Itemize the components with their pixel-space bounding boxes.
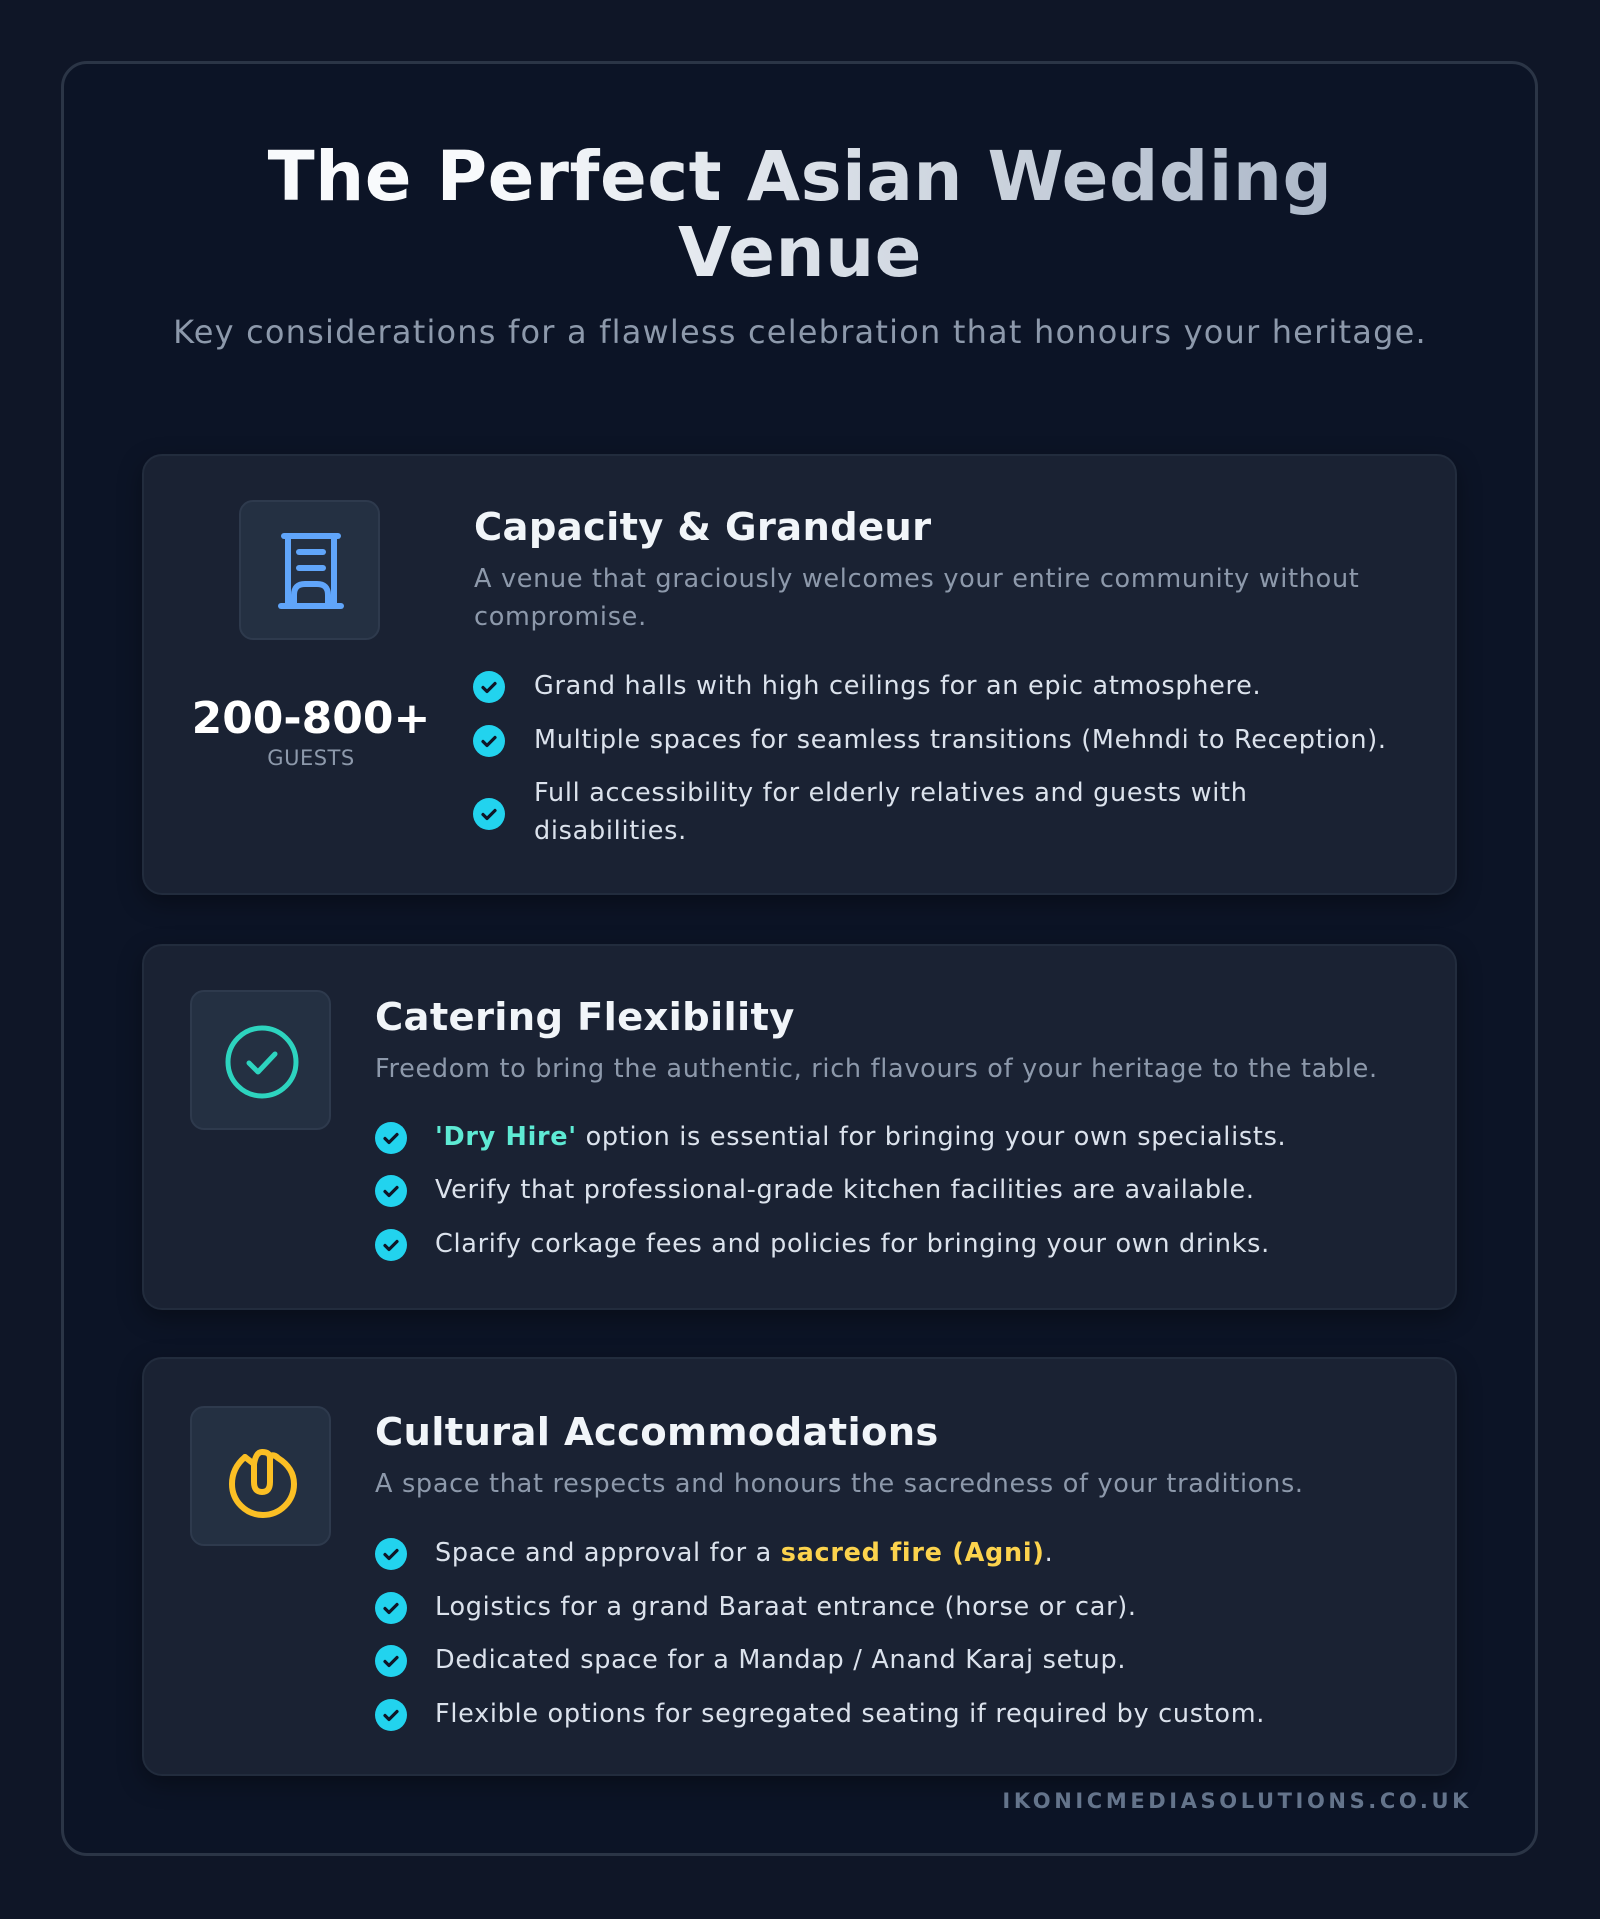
description: A venue that graciously welcomes your entire community without [474, 564, 1360, 594]
icon: building [239, 500, 380, 640]
bullet list: Verify that professional-grade kitchen facilities are available. [435, 1175, 1255, 1205]
heading: Catering Flexibility [375, 995, 795, 1040]
bullet list: Space and approval for a sacred fire (Agni). [435, 1538, 1053, 1568]
title [0, 139, 1600, 291]
heading: Capacity & Grandeur [474, 505, 931, 550]
bullet list: 'Dry Hire' option is essential for bringing your own specialists. [435, 1122, 1286, 1152]
subtitle: Key considerations for a flawless celebration that honours your heritage. [173, 313, 1427, 351]
title: Venue [678, 213, 922, 293]
panel: catering [142, 944, 1457, 1310]
description: A space that respects and honours the sacredness of your traditions. [375, 1469, 1304, 1499]
bullet list: Clarify corkage fees and policies for bringing your own drinks. [435, 1229, 1270, 1259]
bullet list: Flexible options for segregated seating if required by custom. [435, 1699, 1265, 1729]
bullet list [473, 671, 1387, 846]
bullet list: disabilities. [534, 816, 687, 846]
stat: guests [192, 693, 430, 770]
bullet list: Multiple spaces for seamless transitions (Mehndi to Reception). [534, 725, 1387, 755]
bullet list: Dedicated space for a Mandap / Anand Karaj setup. [435, 1645, 1126, 1675]
bullet list: Grand halls with high ceilings for an epic atmosphere. [534, 671, 1261, 701]
description [474, 564, 1360, 632]
stat: guests: 200-800+ [192, 693, 430, 744]
footer credit: IKONICMEDIASOLUTIONS.CO.UK [1002, 1789, 1472, 1813]
description: Freedom to bring the authentic, rich flavours of your heritage to the table. [375, 1054, 1378, 1084]
bullet list: Logistics for a grand Baraat entrance (horse or car). [435, 1592, 1137, 1622]
panel: capacity [142, 454, 1457, 895]
title: The Perfect Asian Wedding [268, 137, 1332, 217]
description: compromise. [474, 602, 647, 632]
stat: guests: GUESTS [267, 746, 355, 770]
bullet list [375, 1122, 1286, 1261]
bullet list [375, 1538, 1265, 1731]
icon: fire [190, 1406, 331, 1546]
bullet list: Full accessibility for elderly relatives and guests with [534, 778, 1248, 808]
panel: cultural [142, 1357, 1457, 1776]
icon: check circle [190, 990, 331, 1130]
heading: Cultural Accommodations [375, 1410, 939, 1455]
